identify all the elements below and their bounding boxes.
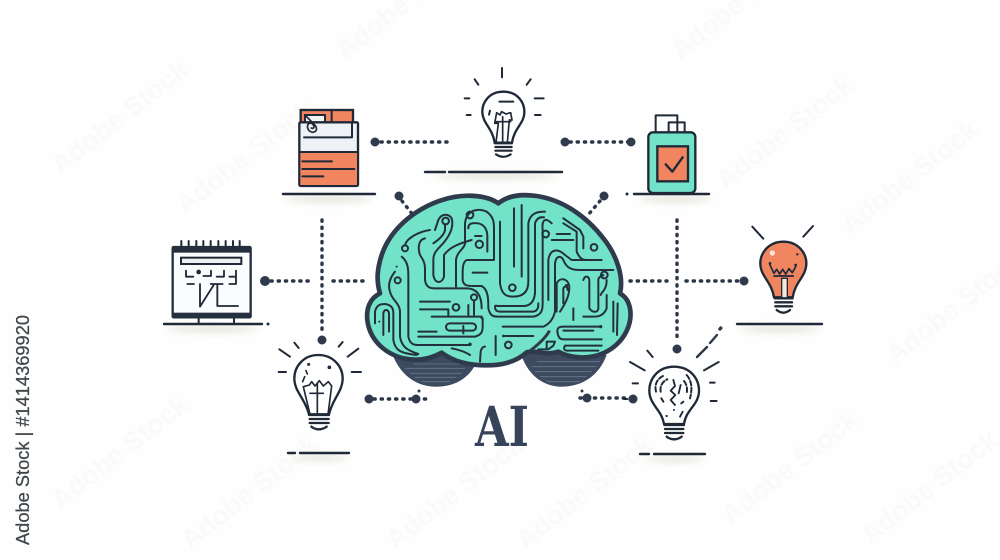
watermark pattern: Adobe Stock — [715, 404, 865, 530]
icon: calendar chart — [173, 241, 251, 324]
icon: orange light bulb — [752, 226, 813, 313]
watermark pattern: Adobe Stock — [175, 429, 325, 555]
watermark pattern: Adobe Stock — [380, 429, 530, 555]
brain outline — [367, 195, 631, 365]
icon: bottom right light bulb — [624, 351, 719, 439]
watermark pattern: Adobe Stock — [855, 424, 1000, 550]
watermark pattern: Adobe Stock — [510, 429, 660, 555]
watermark pattern: Adobe Stock — [710, 69, 860, 195]
icon: teal bottle with check — [648, 115, 695, 193]
icon: bottom left light bulb — [279, 342, 361, 429]
watermark pattern: Adobe Stock — [45, 389, 195, 515]
connectors: dotted lines — [260, 138, 748, 404]
baselines with soft shadows — [164, 172, 822, 462]
watermark pattern: Adobe Stock — [45, 54, 195, 180]
vertical stock credit: Adobe Stock | #1414369920 — [13, 315, 33, 545]
icon: top light bulb — [465, 68, 544, 157]
brain — [367, 195, 631, 387]
title: AI: AI — [474, 394, 529, 459]
circuit traces — [375, 205, 618, 362]
lower brain lobes — [393, 348, 607, 387]
watermark pattern: Adobe Stock — [170, 94, 320, 220]
watermark pattern: Adobe Stock — [835, 114, 985, 240]
icon: document folder — [299, 110, 358, 186]
